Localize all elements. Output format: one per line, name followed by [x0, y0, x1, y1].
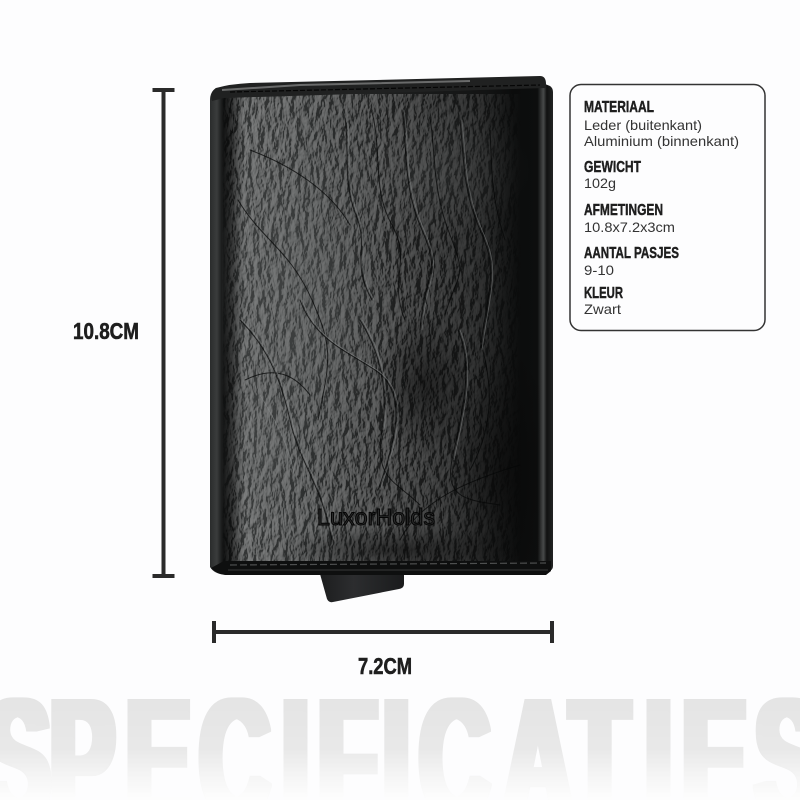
spec: kleur: KLEUR	[584, 285, 623, 302]
bottom flap with stitching	[211, 561, 551, 575]
spec: aantal pasjes	[584, 245, 679, 278]
specifications panel	[570, 84, 765, 330]
spec: gewicht: GEWICHT	[584, 159, 641, 176]
pull tab	[320, 574, 404, 602]
height label: 10.8CM	[73, 318, 139, 344]
leather grain	[224, 94, 511, 561]
spec: afmetingen: AFMETINGEN	[584, 202, 663, 219]
wallet body	[210, 84, 553, 575]
height dimension line	[152, 88, 174, 578]
spec: kleur: Zwart	[584, 301, 621, 317]
top flap with stitching	[211, 76, 546, 101]
spec: materiaal: Leder (buitenkant)	[584, 117, 702, 133]
width label: 7.2CM	[358, 653, 412, 679]
spec: afmetingen	[584, 202, 675, 235]
spec: gewicht: 102g	[584, 175, 616, 191]
spec: materiaal: Aluminium (binnenkant)	[584, 133, 739, 149]
leather wrinkles	[238, 110, 520, 540]
light and shade on leather	[226, 139, 508, 561]
spec: aantal pasjes: 9-10	[584, 262, 614, 278]
spec: materiaal	[584, 99, 739, 149]
wallet photo	[195, 76, 555, 602]
spec: aantal pasjes: AANTAL PASJES	[584, 245, 679, 262]
spec: materiaal: MATERIAAL	[584, 99, 654, 116]
spec: gewicht	[584, 159, 641, 191]
spec: kleur	[584, 285, 623, 317]
spec: afmetingen: 10.8x7.2x3cm	[584, 219, 675, 235]
embossed logo: LuxorHolds: LuxorHolds	[317, 504, 435, 530]
width dimension line	[212, 621, 554, 643]
